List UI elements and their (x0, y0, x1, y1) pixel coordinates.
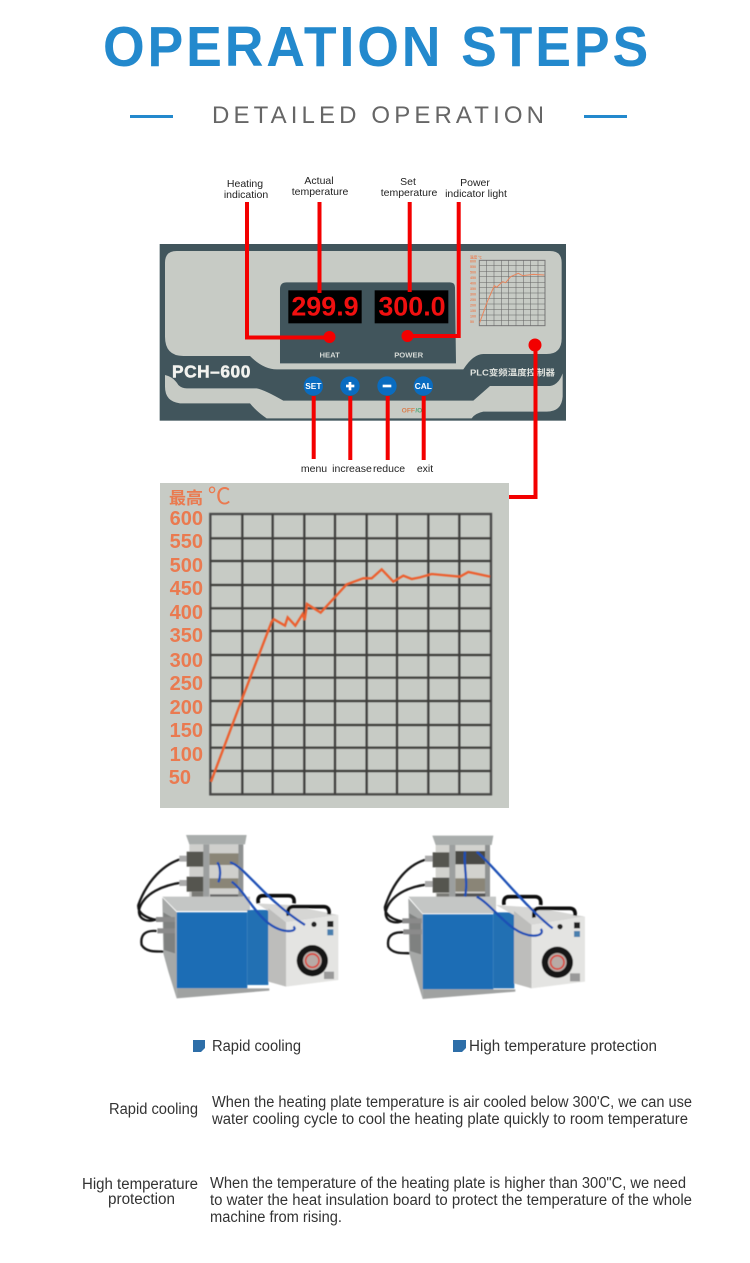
chart unit heading: 最高 ℃ (169, 483, 231, 509)
mini chart: 550 (470, 265, 476, 269)
mini chart: 200 (470, 304, 476, 308)
buttons: SET (305, 381, 321, 391)
callout labels: temperature (292, 186, 348, 198)
callout labels: indication (224, 189, 268, 201)
mini chart: 150 (470, 309, 476, 313)
display block: HEAT (320, 351, 340, 360)
legend: high temperature protection: High temperature protection (469, 1038, 657, 1055)
callout labels: increase (332, 463, 372, 475)
mini chart: 50 (470, 320, 474, 324)
mini chart: 250 (470, 298, 476, 302)
text block: high temperature protection: to water the heat insulation board to protect the temperature of the whole (210, 1192, 692, 1209)
callout lines and dots (247, 202, 540, 497)
callout labels: Heating (227, 178, 263, 190)
chart axis labels: 50 (169, 767, 191, 789)
chart grid (210, 514, 491, 794)
callout labels: indicator light (445, 188, 507, 200)
mini chart: 600 (470, 260, 476, 264)
callout labels: Actual (304, 175, 334, 187)
chart axis labels: 600 (170, 508, 203, 530)
text block: rapid cooling: Rapid cooling (109, 1101, 198, 1118)
off/on switch label (402, 407, 422, 414)
chart axis labels: 250 (170, 673, 203, 695)
chart axis labels: 450 (170, 578, 203, 600)
product photo: rapid cooling (138, 835, 338, 998)
panel: temperature chart (160, 483, 509, 808)
product photo: high temperature protection (385, 836, 585, 999)
callout labels: temperature (381, 187, 437, 199)
text block: rapid cooling (109, 1094, 692, 1128)
mini chart: 500 (470, 271, 476, 275)
callout labels: Power (460, 177, 490, 189)
chart axis labels: 200 (170, 697, 203, 719)
mini chart: 100 (470, 315, 476, 319)
mini chart (470, 254, 545, 326)
display block: POWER (394, 351, 424, 360)
chart axis labels: 300 (170, 650, 203, 672)
text block: high temperature protection (82, 1175, 692, 1226)
mini chart: 400 (470, 282, 476, 286)
callout labels: reduce (373, 463, 405, 475)
text block: high temperature protection: machine from rising. (210, 1209, 342, 1226)
display block: 299.9 (291, 292, 359, 322)
mini chart: 温度 ℃ (470, 254, 482, 259)
chart axis labels: 350 (170, 625, 203, 647)
display block: 300.0 (378, 292, 446, 322)
subtitle with side dashes (130, 102, 627, 129)
title: OPERATION STEPS (103, 14, 648, 78)
text block: high temperature protection: High temperature (82, 1176, 198, 1193)
model name: PCH–600 (172, 361, 250, 381)
chart axis labels: 100 (170, 744, 203, 766)
text block: rapid cooling: When the heating plate temperature is air cooled below 300'C, we can use (212, 1094, 692, 1111)
display block (280, 282, 456, 363)
off/on switch label: OFF (402, 407, 415, 414)
text block: high temperature protection: When the temperature of the heating plate is higher than 300"C, we need (210, 1175, 686, 1192)
chart axis labels: 400 (170, 602, 203, 624)
buttons (304, 376, 433, 396)
chart axis labels: 500 (170, 555, 203, 577)
text block: high temperature protection: protection (108, 1191, 175, 1208)
buttons: CAL (415, 381, 432, 391)
temperature curve (211, 569, 490, 782)
chart axis labels (169, 508, 203, 789)
chart axis labels: 550 (170, 531, 203, 553)
mini chart: 450 (470, 276, 476, 280)
callout labels: menu (301, 463, 327, 475)
panel: PCH-600 controller (160, 244, 566, 421)
off/on switch label: /O (415, 407, 422, 414)
callout labels: exit (417, 463, 433, 475)
callout labels: Set (400, 176, 416, 188)
mini chart: 350 (470, 287, 476, 291)
callout labels (224, 175, 507, 475)
controller name: PLC变频温度控制器 (470, 367, 555, 378)
legend: rapid cooling: Rapid cooling (212, 1038, 301, 1055)
chart axis labels: 150 (170, 720, 203, 742)
mini chart: 300 (470, 293, 476, 297)
subtitle with side dashes: DETAILED OPERATION (212, 102, 544, 129)
text block: rapid cooling: water cooling cycle to cool the heating plate quickly to room temperature (211, 1111, 688, 1128)
